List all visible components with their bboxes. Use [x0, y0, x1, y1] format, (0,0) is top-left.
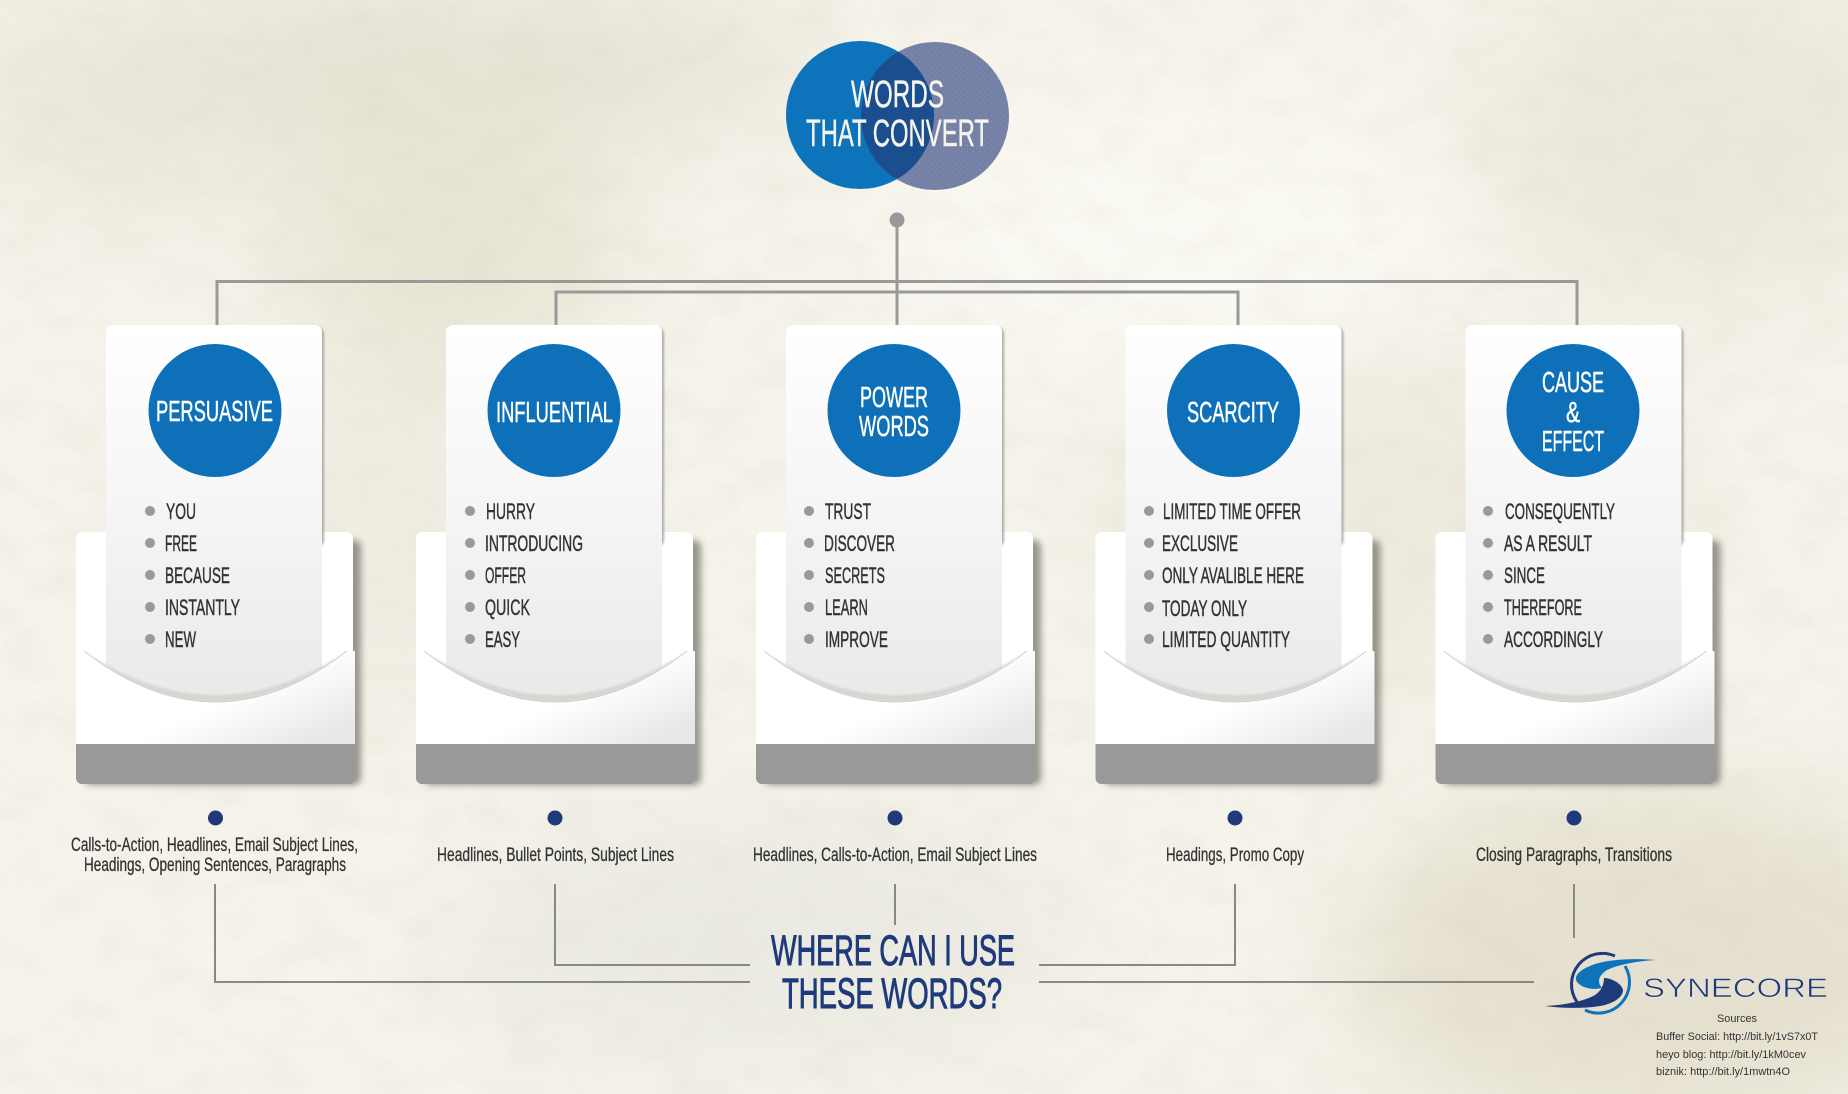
- word list: scarcity: LIMITED QUANTITY: [1162, 627, 1290, 652]
- word list: persuasive: YOU: [166, 499, 196, 524]
- sources: [1656, 1013, 1818, 1078]
- panel: persuasive: [76, 325, 361, 785]
- question heading: THESE WORDS?: [782, 970, 1002, 1018]
- word list: influential: QUICK: [485, 595, 530, 620]
- word list: power words: DISCOVER: [824, 531, 895, 556]
- usage text: persuasive: Headings, Opening Sentences, Paragraphs: [84, 854, 346, 876]
- question heading: [771, 927, 1015, 1018]
- word list: cause and effect: AS A RESULT: [1504, 531, 1592, 556]
- word list: persuasive: BECAUSE: [165, 563, 230, 588]
- usage text: cause and effect: Closing Paragraphs, Transitions: [1476, 844, 1672, 866]
- heading circle: influential: INFLUENTIAL: [496, 397, 613, 429]
- word list: cause and effect: SINCE: [1504, 563, 1545, 588]
- heading circle: power words: [828, 344, 960, 477]
- heading circle: influential: [488, 344, 620, 477]
- usage text: scarcity: Headings, Promo Copy: [1166, 844, 1304, 866]
- sources: heyo blog: http://bit.ly/1kM0cev: [1656, 1049, 1806, 1061]
- logo: synecore: SYNECORE: [1643, 973, 1828, 1003]
- title text: WORDS: [851, 74, 944, 116]
- sources: biznik: http://bit.ly/1mwtn4O: [1656, 1066, 1790, 1078]
- word list: persuasive: INSTANTLY: [165, 595, 240, 620]
- panel: scarcity: [1096, 325, 1380, 785]
- word list: scarcity: ONLY AVALIBLE HERE: [1162, 563, 1304, 588]
- heading circle: persuasive: PERSUASIVE: [156, 396, 273, 428]
- heading circle: cause and effect: &: [1566, 397, 1580, 429]
- sources: Sources: [1717, 1013, 1757, 1025]
- question heading: WHERE CAN I USE: [771, 927, 1015, 975]
- bottom connector lines: [215, 884, 1574, 982]
- word list: cause and effect: THEREFORE: [1504, 595, 1582, 620]
- word list: cause and effect: CONSEQUENTLY: [1505, 499, 1615, 524]
- word list: cause and effect: ACCORDINGLY: [1504, 627, 1603, 652]
- heading circle: persuasive: [148, 344, 282, 477]
- word list: persuasive: [145, 499, 240, 652]
- heading circle: scarcity: SCARCITY: [1187, 397, 1279, 429]
- title text: THAT CONVERT: [806, 113, 989, 155]
- word list: influential: [465, 499, 583, 652]
- sources: Buffer Social: http://bit.ly/1vS7x0T: [1656, 1031, 1818, 1043]
- word list: scarcity: EXCLUSIVE: [1162, 531, 1238, 556]
- word list: scarcity: [1144, 499, 1304, 652]
- usage text: power words: Headlines, Calls-to-Action, Email Subject Lines: [753, 844, 1037, 866]
- word list: power words: TRUST: [825, 499, 871, 524]
- usage text: influential: Headlines, Bullet Points, Subject Lines: [437, 844, 674, 866]
- heading circle: power words: WORDS: [859, 411, 929, 443]
- word list: power words: SECRETS: [825, 563, 885, 588]
- word list: influential: INTRODUCING: [485, 531, 583, 556]
- heading circle: cause and effect: CAUSE: [1542, 367, 1604, 399]
- logo: synecore: [1545, 953, 1828, 1013]
- word list: scarcity: LIMITED TIME OFFER: [1163, 499, 1301, 524]
- word list: influential: EASY: [485, 627, 520, 652]
- word list: influential: OFFER: [485, 563, 526, 588]
- title text: [806, 74, 989, 155]
- panel: influential: [416, 325, 701, 785]
- title venn diagram: [786, 41, 1009, 190]
- usage dots: [208, 810, 1582, 826]
- heading circle: power words: POWER: [860, 382, 928, 414]
- panel: cause and effect: [1436, 325, 1720, 785]
- top connector lines: [217, 212, 1577, 326]
- word list: influential: HURRY: [486, 499, 535, 524]
- heading circle: scarcity: [1167, 344, 1300, 477]
- word list: power words: LEARN: [825, 595, 868, 620]
- heading circle: cause and effect: [1506, 344, 1640, 477]
- word list: scarcity: TODAY ONLY: [1162, 596, 1247, 621]
- heading circle: cause and effect: EFFECT: [1542, 426, 1604, 458]
- word list: cause and effect: [1483, 499, 1615, 652]
- word list: power words: [804, 499, 895, 652]
- usage text: persuasive: [71, 834, 358, 876]
- word list: persuasive: FREE: [165, 531, 197, 556]
- panel: power words: [756, 325, 1041, 785]
- word list: power words: IMPROVE: [825, 627, 888, 652]
- word list: persuasive: NEW: [165, 627, 196, 652]
- usage text: persuasive: Calls-to-Action, Headlines, Email Subject Lines,: [71, 834, 358, 856]
